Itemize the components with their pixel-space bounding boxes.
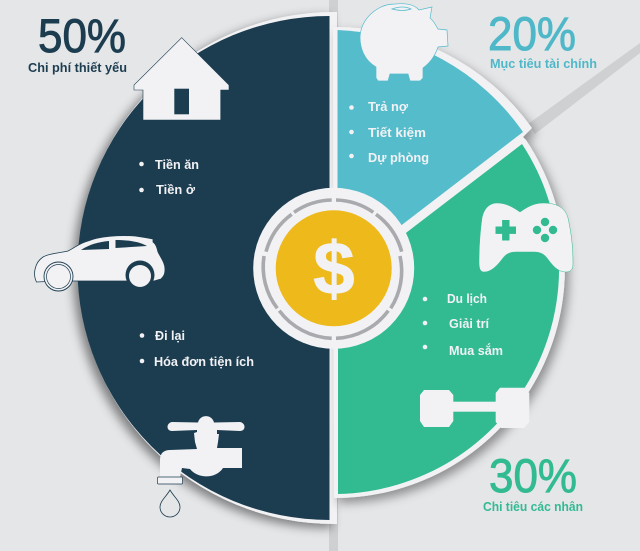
heading: 30%: Chi tiêu các nhân xyxy=(483,499,583,514)
diagonal stripe xyxy=(528,43,640,134)
center coin: $ xyxy=(313,227,355,310)
list: financial goals: Trả nợ xyxy=(368,99,409,114)
list: financial goals xyxy=(349,99,429,165)
heading: 50% xyxy=(28,9,127,75)
panel: 30% personal spending segment xyxy=(338,144,559,494)
heading: 50%: Chi phí thiết yếu xyxy=(28,60,127,75)
icon: house xyxy=(134,38,229,120)
icon: water tap xyxy=(158,416,244,517)
list: personal spending xyxy=(423,291,503,358)
list: essentials top: Tiền ở xyxy=(156,182,196,197)
vertical stripe xyxy=(329,0,338,551)
icon: dumbbell xyxy=(420,388,529,428)
panel: 20% financial goals segment xyxy=(338,30,523,274)
list: personal spending: Du lịch xyxy=(447,291,487,306)
heading: 50%: 50% xyxy=(38,9,126,62)
panel: right segments backing xyxy=(333,27,565,498)
list: essentials bottom: Đi lại xyxy=(155,328,185,343)
icon: piggy bank xyxy=(360,4,448,81)
icon: game controller xyxy=(479,203,573,272)
list: financial goals: Dự phòng xyxy=(368,150,429,165)
heading: 30%: 30% xyxy=(489,449,577,502)
list: financial goals: Tiết kiệm xyxy=(368,125,426,140)
center coin xyxy=(253,188,414,349)
list: essentials top xyxy=(139,157,199,197)
list: essentials bottom: Hóa đơn tiện ích xyxy=(154,354,254,369)
heading: 20%: 20% xyxy=(488,7,576,60)
list: essentials bottom xyxy=(140,328,254,369)
list: personal spending: Mua sắm xyxy=(449,343,503,358)
panel: 50% essentials segment xyxy=(78,12,337,524)
list: essentials top: Tiền ăn xyxy=(155,157,199,172)
heading: 20%: Mục tiêu tài chính xyxy=(490,56,597,71)
icon: car xyxy=(35,236,165,291)
list: personal spending: Giải trí xyxy=(449,316,489,331)
